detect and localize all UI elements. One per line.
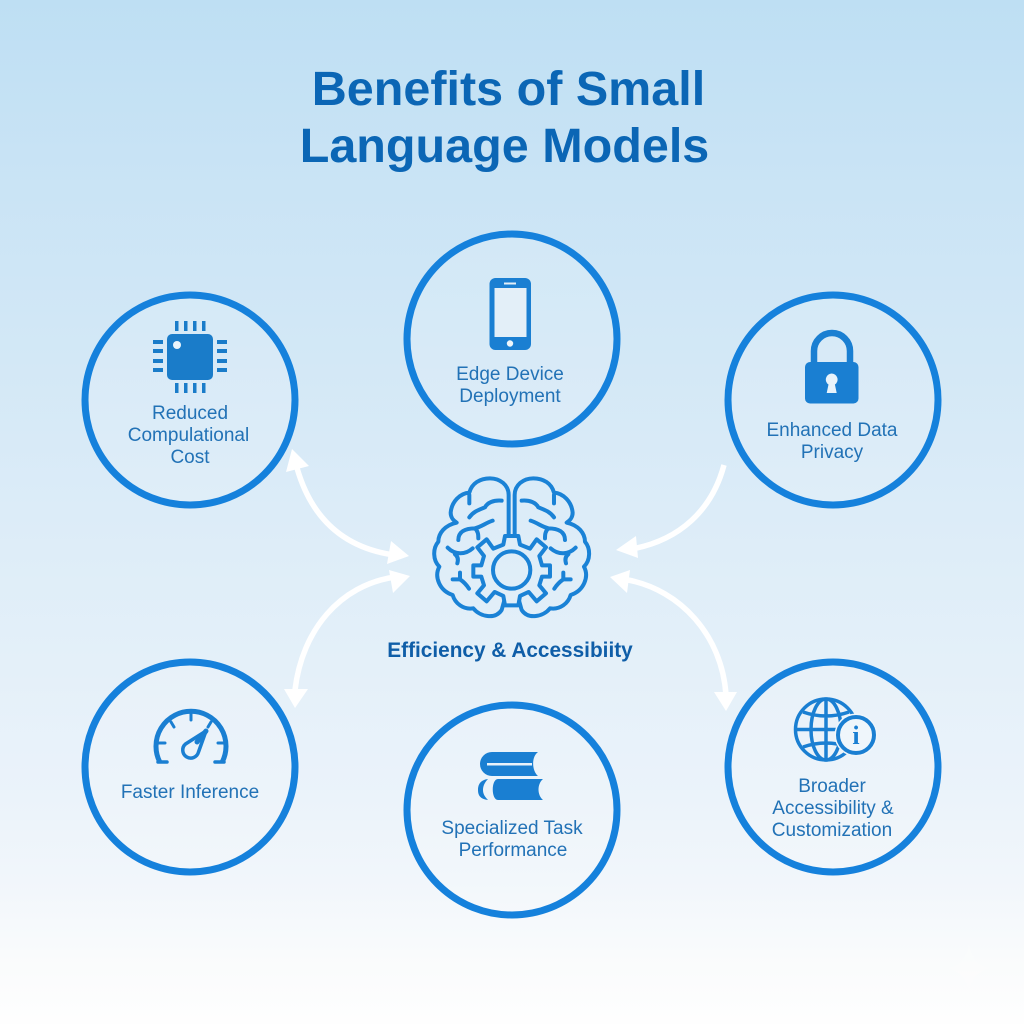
label: specialized task performance: Specialized Task xyxy=(441,818,583,839)
label: efficiency and accessibility: Efficiency & Accessibiity xyxy=(387,639,633,662)
icon: microchip xyxy=(153,321,227,393)
title xyxy=(300,62,709,173)
label: specialized task performance: Performance xyxy=(459,840,567,861)
right hemisphere xyxy=(515,478,589,616)
panel: broader accessibility and customization xyxy=(728,662,938,872)
icon: globe with info badge xyxy=(796,699,878,760)
label: broader accessibility and customization: Accessibility & xyxy=(772,798,894,819)
panel: faster inference xyxy=(85,662,295,872)
icon: smartphone xyxy=(490,278,531,350)
icon: speedometer gauge xyxy=(156,711,226,762)
panel: enhanced data privacy xyxy=(728,295,938,505)
arrow: broader access to brain xyxy=(610,570,737,711)
label: reduced computational cost: Cost xyxy=(170,447,210,468)
label: reduced computational cost: Reduced xyxy=(152,403,228,424)
gear xyxy=(473,536,550,605)
arrow: lock to brain xyxy=(616,465,724,558)
panel: reduced computational cost xyxy=(85,295,295,505)
icon: padlock xyxy=(805,333,858,404)
label: edge device deployment: Edge Device xyxy=(456,364,564,385)
label: reduced computational cost: Compulational xyxy=(128,425,249,446)
faint sparkle watermark xyxy=(947,944,991,993)
label: reduced computational cost xyxy=(128,403,249,468)
title: Benefits of Small xyxy=(312,62,705,116)
label: enhanced data privacy: Privacy xyxy=(801,442,864,463)
left hemisphere xyxy=(434,478,509,616)
panel: specialized task performance xyxy=(407,705,617,915)
label: faster inference: Faster Inference xyxy=(121,782,259,803)
icon: brain with gear xyxy=(434,478,589,616)
label: specialized task performance xyxy=(441,818,583,861)
label: broader accessibility and customization xyxy=(772,776,894,841)
label: enhanced data privacy xyxy=(766,420,898,463)
title: Language Models xyxy=(300,119,709,173)
icon: stacked books xyxy=(478,752,543,800)
label: broader accessibility and customization: Broader xyxy=(798,776,866,797)
arrow: gauge to brain xyxy=(284,570,410,708)
label: broader accessibility and customization: Customization xyxy=(772,820,892,841)
label: enhanced data privacy: Enhanced Data xyxy=(766,420,898,441)
icon: globe with info badge: i xyxy=(852,721,860,750)
panel: edge device deployment xyxy=(407,234,617,444)
label: edge device deployment xyxy=(456,364,564,407)
arrow: chip to brain xyxy=(286,449,409,564)
label: edge device deployment: Deployment xyxy=(459,386,561,407)
